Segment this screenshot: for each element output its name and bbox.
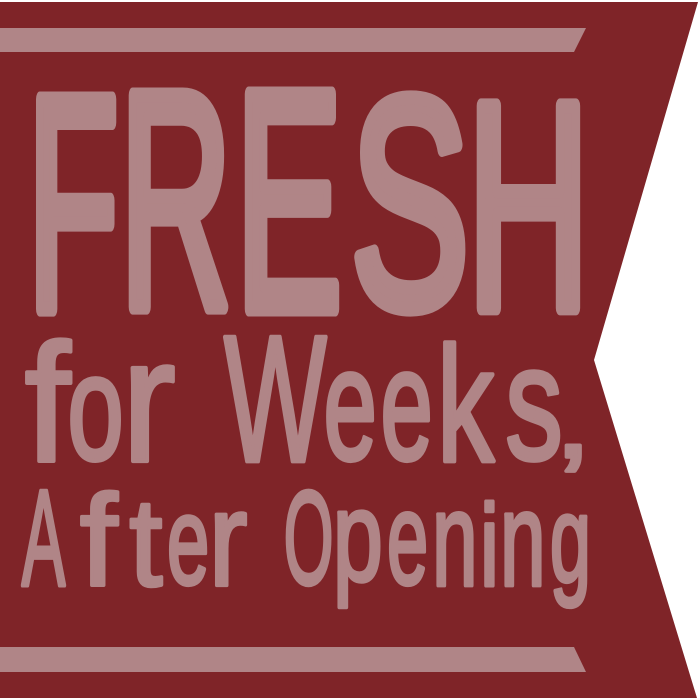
- text line: After Opening: [22, 461, 591, 615]
- text line: for Weeks,: r: [122, 302, 176, 498]
- heading: FRESH: S: [350, 37, 469, 371]
- text line: After Opening: g: [550, 471, 591, 608]
- text line: for Weeks,: e: [324, 315, 377, 493]
- heading: FRESH: F: [28, 33, 119, 374]
- text line: After Opening: r: [208, 464, 247, 614]
- text line: for Weeks,: s: [505, 311, 563, 494]
- text line: for Weeks,: W: [224, 298, 327, 500]
- heading: FRESH: E: [236, 26, 342, 376]
- text line: After Opening: p: [333, 465, 383, 608]
- heading: FRESH: [28, 26, 590, 376]
- bottom stripe: [0, 647, 586, 672]
- text line: After Opening: n: [500, 463, 546, 614]
- text line: for Weeks,: e: [380, 315, 433, 493]
- text line: After Opening: f: [80, 469, 119, 614]
- text line: for Weeks,: ,: [554, 359, 592, 481]
- text line: After Opening: e: [387, 465, 428, 612]
- text line: After Opening: O: [284, 465, 333, 613]
- text line: After Opening: A: [22, 461, 66, 615]
- text line: for Weeks,: [25, 298, 592, 500]
- heading: FRESH: H: [467, 42, 590, 370]
- text line: for Weeks,: o: [68, 324, 124, 492]
- top stripe: [0, 28, 586, 52]
- text line: for Weeks,: k: [437, 313, 494, 496]
- text line: After Opening: i: [480, 480, 499, 610]
- text line: After Opening: n: [432, 463, 478, 614]
- heading: FRESH: R: [120, 28, 232, 373]
- text line: After Opening: e: [167, 470, 209, 610]
- text line: for Weeks,: f: [25, 310, 71, 497]
- text line: After Opening: t: [129, 473, 162, 612]
